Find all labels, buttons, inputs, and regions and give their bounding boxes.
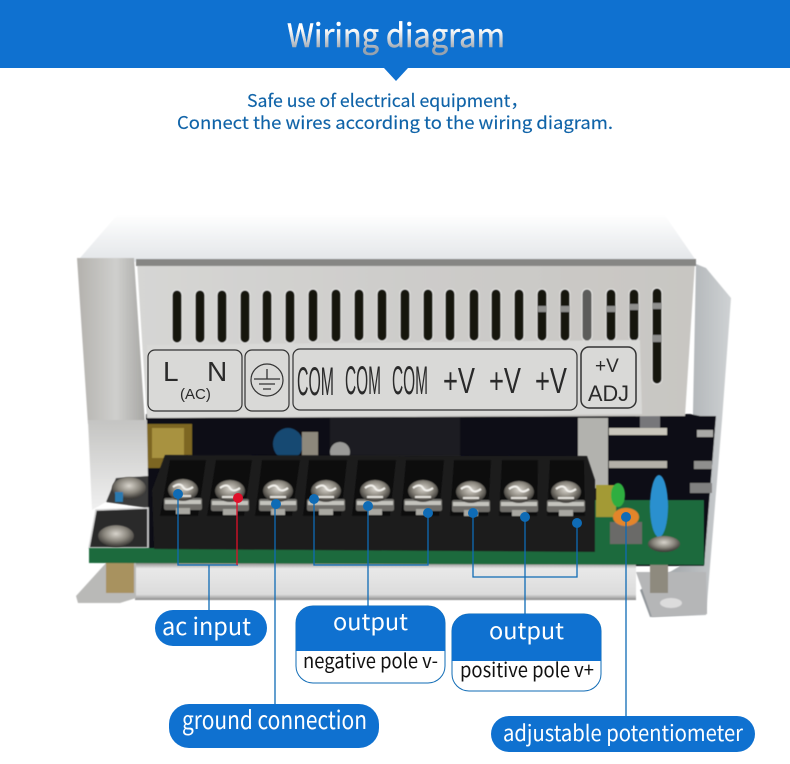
board mounting screw bbox=[648, 536, 680, 552]
label: COM and +V box: COM bbox=[297, 360, 334, 404]
circuit board bbox=[89, 500, 704, 565]
power supply photo bbox=[76, 214, 731, 617]
label: L N AC box: (AC) bbox=[180, 386, 211, 403]
callout: output negative pole bbox=[296, 603, 445, 683]
label: L N AC box: L bbox=[163, 356, 179, 387]
subtitle text bbox=[177, 88, 613, 135]
left bracket lower plate bbox=[106, 476, 148, 508]
top surface of case bbox=[80, 214, 697, 262]
terminal block bbox=[152, 455, 595, 552]
callout: output positive pole: positive pole v+ bbox=[460, 654, 594, 683]
label: +V ADJ box: ADJ bbox=[588, 381, 629, 406]
ground connector bbox=[271, 499, 281, 705]
label: COM and +V box: +V bbox=[489, 360, 521, 401]
subtitle text: Safe use of electrical equipment， bbox=[247, 88, 528, 113]
label: COM and +V box: +V bbox=[443, 360, 475, 401]
label: +V ADJ box: +V bbox=[595, 356, 619, 377]
interior of the unit bbox=[146, 414, 716, 566]
callout: adjustable potentiometer: adjustable potentiometer bbox=[503, 716, 743, 748]
front panel bbox=[137, 262, 695, 418]
subtitle text: Connect the wires according to the wiring diagram. bbox=[177, 110, 613, 135]
callout: output positive pole: output bbox=[489, 612, 564, 646]
connector lines and points bbox=[173, 489, 631, 717]
label: +V ADJ box bbox=[581, 347, 636, 408]
title: Wiring diagram bbox=[287, 11, 505, 57]
base plate bbox=[135, 563, 636, 600]
blue disc capacitor bbox=[650, 475, 668, 537]
left bracket bbox=[77, 258, 148, 470]
right side flange bbox=[640, 264, 731, 617]
label: L N AC box bbox=[148, 350, 242, 411]
callout: output positive pole bbox=[452, 612, 601, 691]
left mounting screws bbox=[112, 477, 146, 499]
label: L N AC box: N bbox=[207, 356, 227, 387]
callout: output negative pole: output bbox=[333, 603, 408, 637]
callout: ground connection bbox=[169, 701, 379, 748]
terminal recesses bbox=[160, 460, 585, 516]
label: COM and +V box bbox=[293, 349, 577, 410]
label: ground symbol box bbox=[245, 350, 289, 411]
yellow capacitor and green LED bbox=[596, 485, 616, 517]
header banner bbox=[0, 0, 790, 81]
terminal screws bbox=[164, 479, 585, 516]
negative output connector bbox=[309, 494, 433, 607]
callout: ac input: ac input bbox=[162, 608, 251, 642]
positive output connector bbox=[468, 508, 582, 615]
trimmer potentiometer bbox=[610, 522, 642, 544]
label: COM and +V box: +V bbox=[535, 360, 567, 401]
callout: output negative pole: negative pole v- bbox=[303, 645, 438, 674]
vent slots bbox=[172, 288, 662, 384]
label: COM and +V box: COM bbox=[392, 359, 428, 403]
label plate bbox=[147, 340, 642, 418]
potentiometer connector bbox=[621, 512, 631, 717]
ac input connector bbox=[173, 489, 243, 610]
callout: ground connection: ground connection bbox=[182, 701, 367, 737]
label: COM and +V box: COM bbox=[345, 359, 381, 403]
right mounting foot bbox=[636, 572, 707, 617]
